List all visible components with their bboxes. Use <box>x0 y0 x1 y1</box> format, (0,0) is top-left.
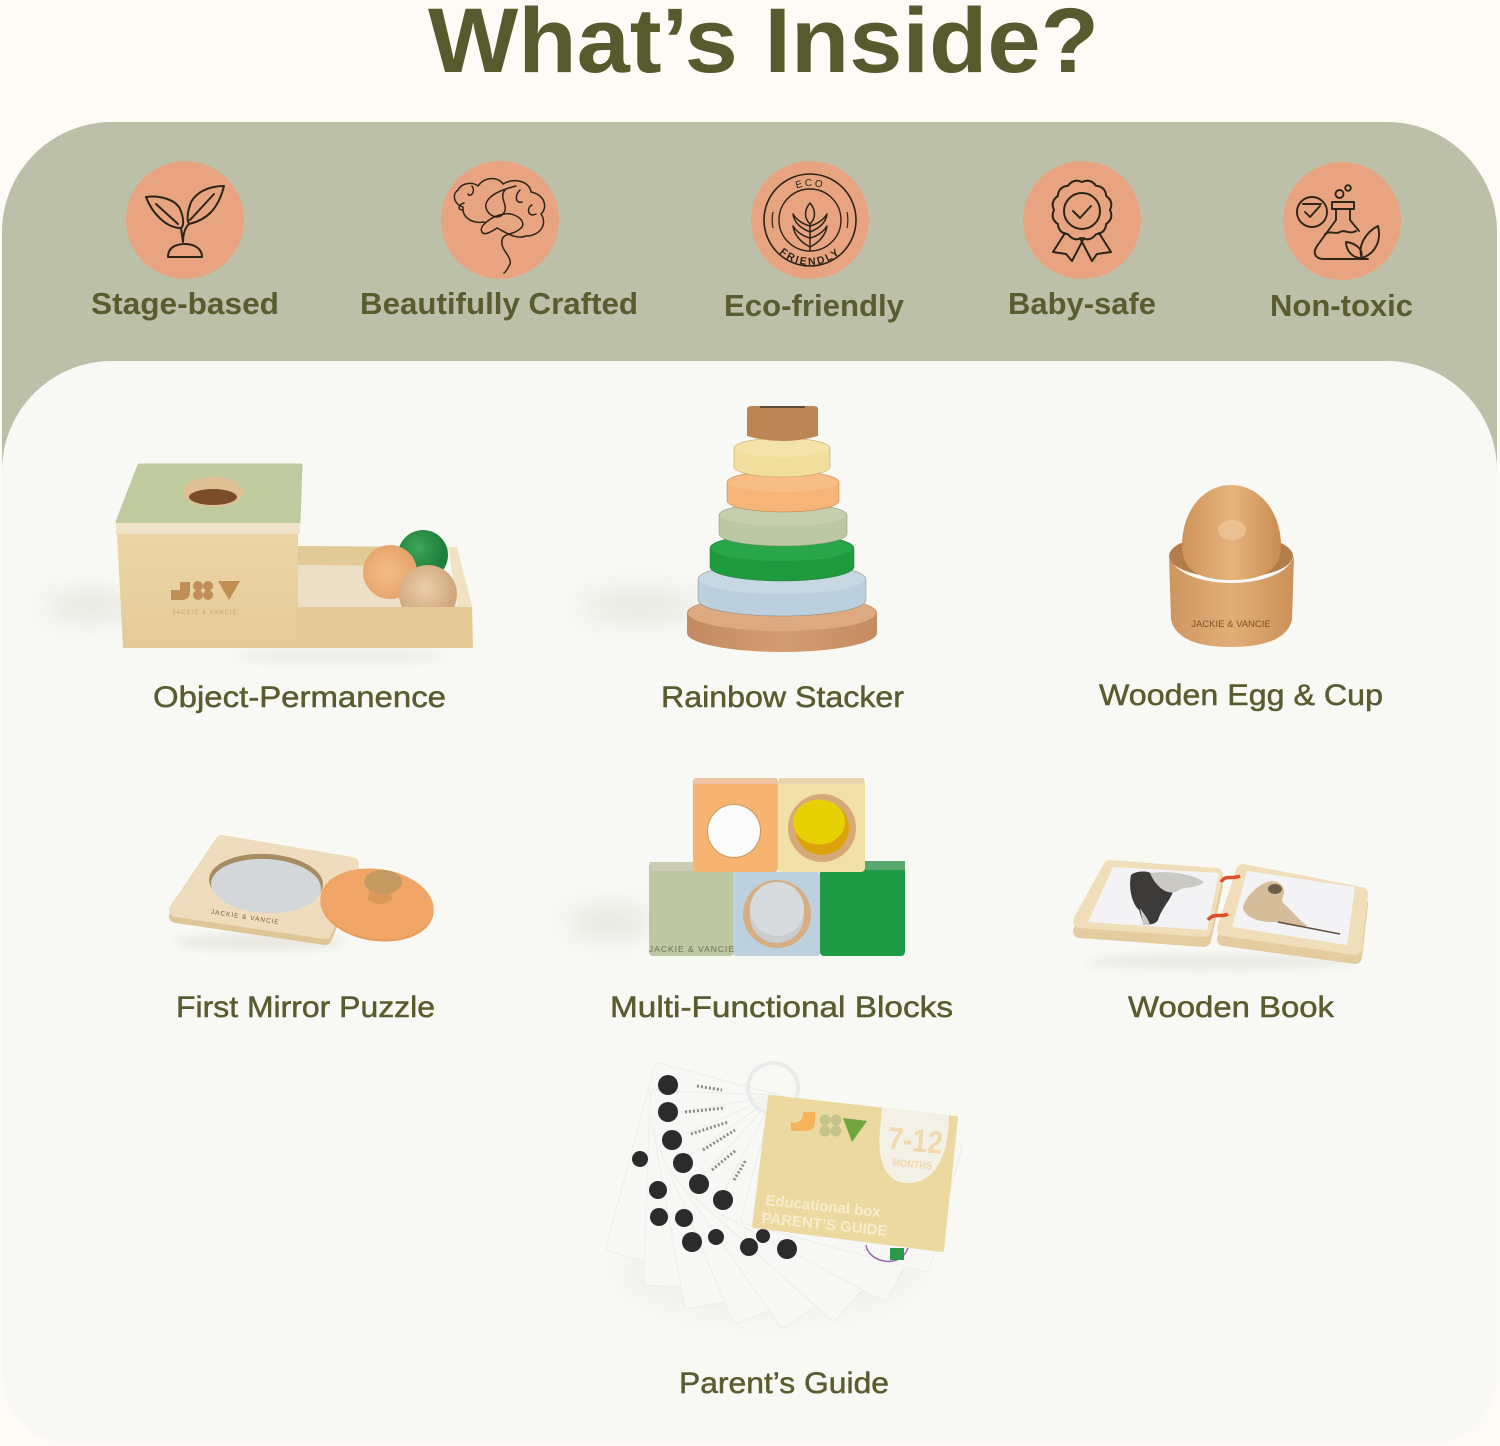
benefit: beautifully crafted <box>360 161 638 321</box>
label: parent's guide: Parent’s Guide <box>679 1367 889 1400</box>
benefit: non-toxic: Non-toxic <box>1270 288 1413 323</box>
label: multi-functional blocks: Multi-Functional Blocks <box>610 991 953 1024</box>
ribbon ties <box>1208 876 1240 920</box>
age badge <box>879 1107 949 1183</box>
benefit: baby-safe <box>1008 161 1156 321</box>
benefit: beautifully crafted: Beautifully Crafted <box>360 286 638 321</box>
icon: award rosette <box>1053 181 1111 261</box>
purple circle detail <box>866 1245 908 1261</box>
guide cover <box>754 1097 956 1250</box>
guide cover text: PARENT’S GUIDE <box>761 1210 888 1240</box>
benefit: non-toxic <box>1270 162 1413 323</box>
product: multi-functional blocks <box>568 778 905 956</box>
label: wooden book: Wooden Book <box>1128 991 1335 1024</box>
label: wooden egg and cup: Wooden Egg & Cup <box>1099 679 1383 712</box>
product: object-permanence box: JACKIE & VANCIE <box>172 610 238 616</box>
product: multi-functional blocks: JACKIE & VANCIE <box>649 944 735 954</box>
card text ticks <box>685 1086 746 1180</box>
metal ring <box>748 1063 798 1113</box>
product: parent's guide cards: MONTHS <box>892 1157 933 1172</box>
benefit: stage-based: Stage-based <box>91 286 279 321</box>
guide cover text: Educational box <box>765 1192 882 1221</box>
card icon dots <box>632 1075 797 1259</box>
label: rainbow stacker: Rainbow Stacker <box>661 681 904 714</box>
icon: sprout <box>146 186 224 257</box>
benefit: eco-friendly: Eco-friendly <box>724 288 905 323</box>
logo <box>171 581 240 600</box>
icon: line brain <box>454 179 545 273</box>
icon: eco badge: FRIENDLY <box>780 248 838 266</box>
label: object-permanence: Object-Permanence <box>153 681 446 714</box>
benefit: eco-friendly <box>724 161 905 323</box>
product: parent's guide cards <box>605 1062 963 1329</box>
product: rainbow stacker <box>580 406 877 652</box>
monkey <box>1243 881 1308 927</box>
product: object-permanence box <box>45 465 473 662</box>
product: wooden book <box>1080 867 1361 969</box>
label: first mirror puzzle: First Mirror Puzzle <box>176 991 435 1024</box>
icon: eco badge <box>763 173 857 267</box>
icon: flask with leaf <box>1297 185 1379 259</box>
panel: contents <box>2 361 1497 1444</box>
product: parent's guide cards: 7-12 <box>886 1120 944 1161</box>
product: first mirror puzzle <box>175 842 438 949</box>
elephant <box>1130 871 1175 924</box>
benefit: baby-safe: Baby-safe <box>1008 286 1156 321</box>
panel: benefits <box>2 122 1497 468</box>
product: wooden egg and cup <box>1169 485 1294 647</box>
icon: eco badge: ECO <box>795 179 822 188</box>
benefit: stage-based <box>91 161 279 321</box>
product: first mirror puzzle: JACKIE & VANCIE <box>210 909 280 926</box>
guide logo <box>791 1112 867 1142</box>
product: wooden egg and cup: JACKIE & VANCIE <box>1191 619 1271 630</box>
guide cover text <box>761 1192 890 1240</box>
